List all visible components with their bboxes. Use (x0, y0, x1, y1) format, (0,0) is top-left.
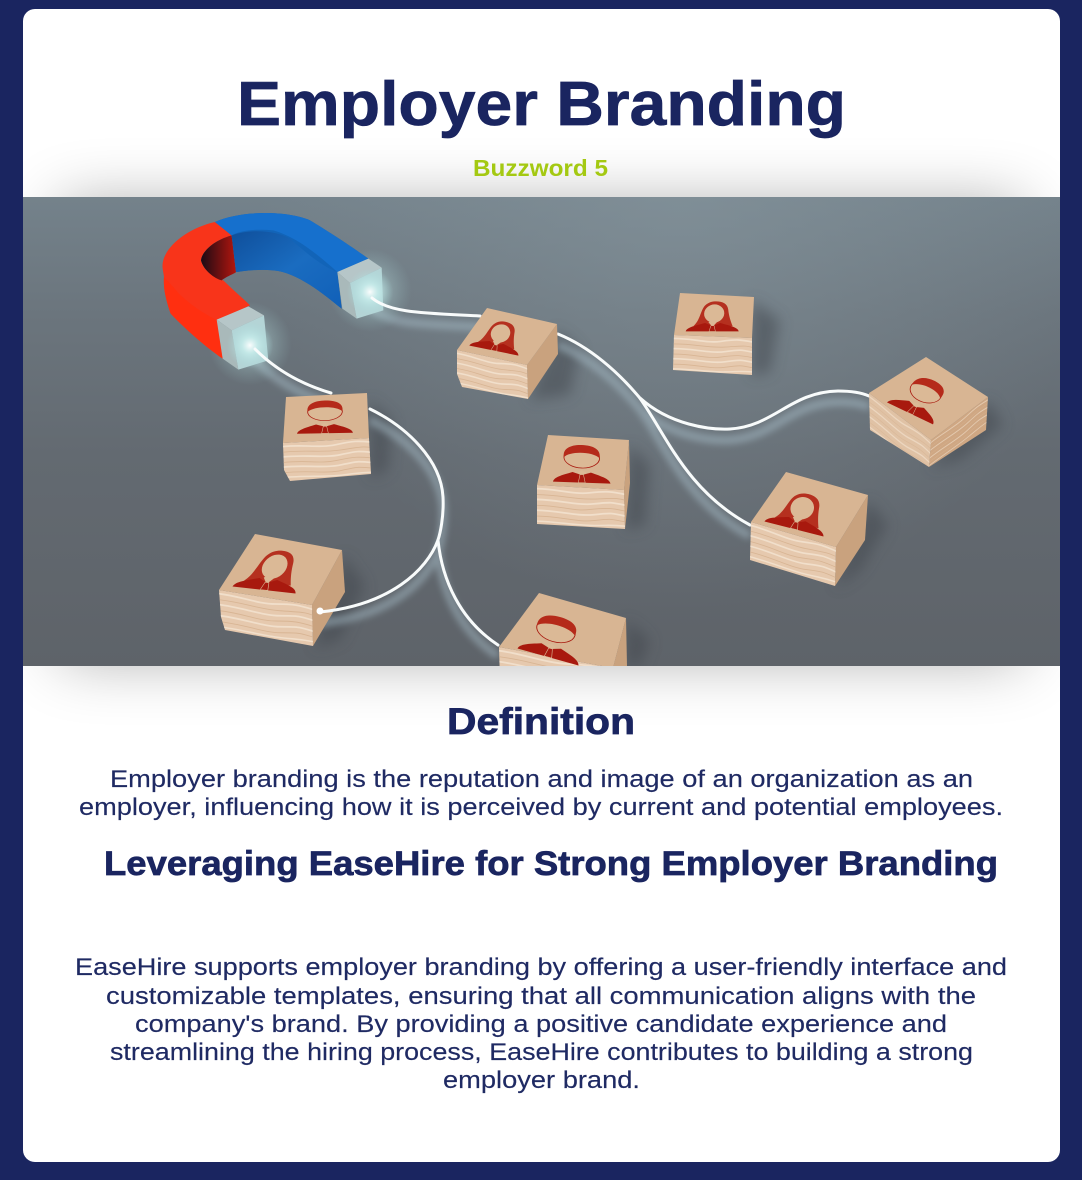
block shadows (315, 300, 1003, 666)
block: man, right (869, 357, 988, 467)
cable reflections (255, 309, 869, 656)
cable ending with a dot on the bottom-left block (316, 540, 438, 614)
EaseHire description: company's brand. By providing a positive candidate experience and (135, 1011, 947, 1038)
EaseHire description: customizable templates, ensuring that all communication aligns with the (106, 983, 976, 1010)
magnet (162, 213, 412, 385)
heading: definition: Definition (447, 701, 635, 742)
title: Employer Branding (237, 70, 846, 139)
block: woman, top centre (454, 308, 558, 400)
block: man, centre (533, 435, 630, 529)
EaseHire description (75, 954, 1007, 1094)
block: man, bottom centre (499, 593, 627, 666)
definition text: Employer branding is the reputation and image of an organization as an (110, 766, 973, 793)
photo: magnet attracting wooden employee blocks (23, 197, 1060, 706)
block: woman, top right (670, 293, 756, 375)
block: woman, bottom left (214, 534, 345, 646)
definition text (79, 766, 1003, 821)
EaseHire description: employer brand. (443, 1067, 640, 1094)
block: woman, bottom right (747, 472, 868, 586)
heading: leveraging EaseHire: Leveraging EaseHire for Strong Employer Branding (104, 845, 998, 883)
subtitle: Buzzword 5 (473, 155, 608, 181)
definition text: employer, influencing how it is perceived by current and potential employees. (79, 794, 1003, 821)
block: man, left (280, 393, 376, 481)
glowing cables (255, 298, 869, 645)
EaseHire description: EaseHire supports employer branding by offering a user-friendly interface and (75, 954, 1007, 981)
EaseHire description: streamlining the hiring process, EaseHire contributes to building a strong (110, 1039, 973, 1066)
